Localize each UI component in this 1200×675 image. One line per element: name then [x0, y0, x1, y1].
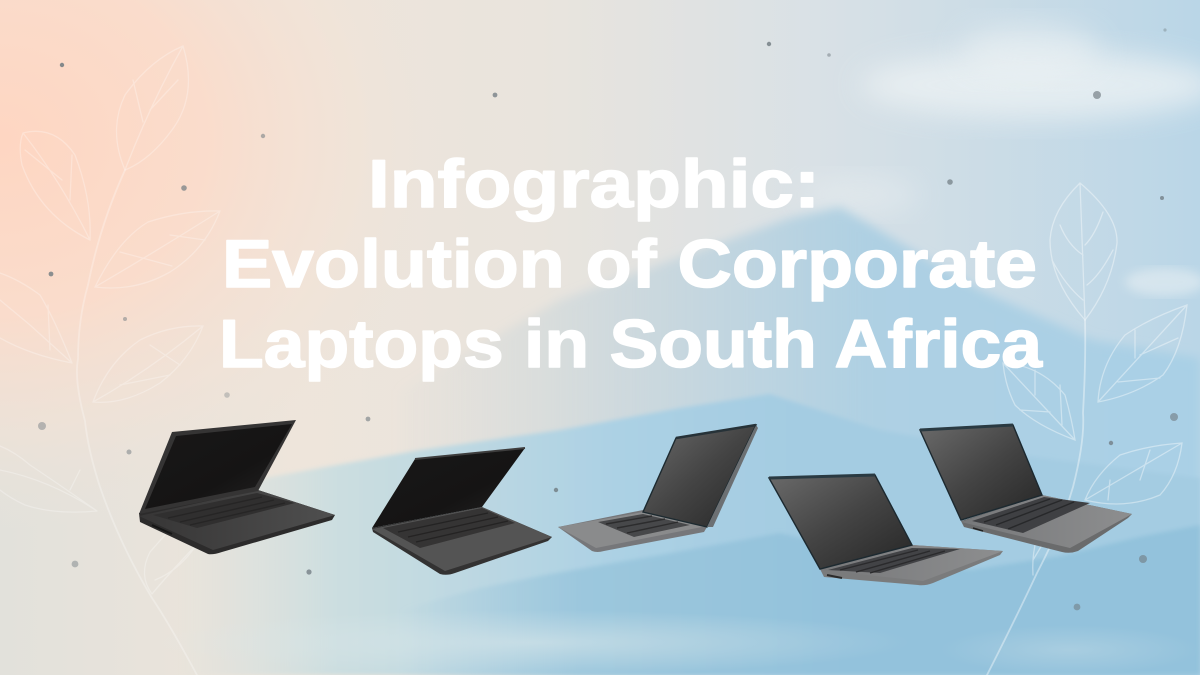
laptop 3: grey, facing right	[558, 425, 758, 552]
laptop 4: grey, facing left	[769, 475, 1003, 585]
laptop 5: grey, facing left	[920, 425, 1132, 553]
title: Evolution of Corporate	[222, 226, 1037, 302]
background: clouds	[800, 24, 1200, 296]
laptop 2: dark, facing left	[372, 448, 552, 575]
title: Infographic:	[368, 146, 820, 222]
background: layered watercolor mountains	[150, 207, 1200, 675]
decorative plant: right	[987, 183, 1187, 675]
title	[219, 146, 1043, 382]
laptop 1: dark, facing left	[139, 420, 335, 554]
decorative plant: left	[0, 46, 220, 675]
title: Laptops in South Africa	[219, 306, 1043, 382]
